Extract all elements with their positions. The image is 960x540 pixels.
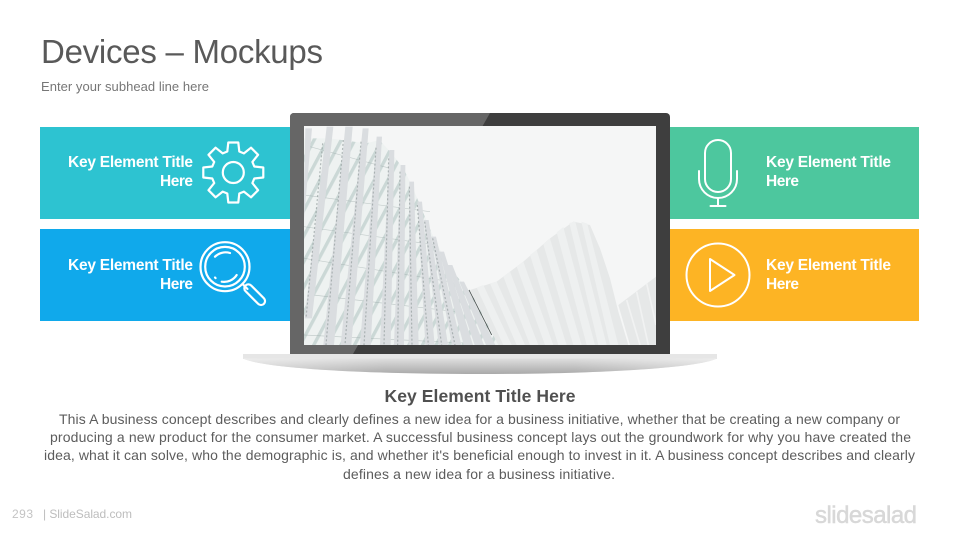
panel: search card bbox=[40, 229, 290, 321]
search card title bbox=[68, 257, 193, 293]
laptop bezel bbox=[290, 113, 670, 354]
bezel gloss bbox=[290, 113, 490, 354]
microphone card title: Here bbox=[766, 173, 799, 190]
laptop mockup bbox=[243, 113, 717, 374]
gear card title: Key Element Title bbox=[68, 154, 193, 171]
play card title: Key Element Title bbox=[766, 257, 891, 274]
logo wordmark: slidesalad bbox=[815, 502, 917, 529]
body paragraph: producing a new product for the consumer market. A successful business concept lays out the groundwork for why you have created the bbox=[50, 429, 911, 445]
footer page number: 293 bbox=[12, 507, 33, 521]
title: Devices – Mockups bbox=[41, 33, 323, 70]
panel: play card bbox=[670, 229, 919, 321]
body paragraph: idea, what it can solve, who the demographic is, and whether it's beneficial enough to invest in it. A business concept describes and clearly bbox=[44, 447, 915, 463]
icon: gear bbox=[203, 142, 263, 202]
microphone card title bbox=[766, 154, 891, 190]
gear card title bbox=[68, 154, 193, 190]
screen photo: white ribbed building bbox=[304, 126, 656, 345]
search card title: Here bbox=[160, 276, 193, 293]
panel: gear card bbox=[40, 127, 290, 219]
play card title: Here bbox=[766, 276, 799, 293]
gear card title: Here bbox=[160, 173, 193, 190]
play card title bbox=[766, 257, 891, 293]
panel: microphone card bbox=[670, 127, 919, 219]
laptop base shadow bbox=[243, 358, 717, 374]
body paragraph: This A business concept describes and clearly defines a new idea for a business initiative, whether that be creating a new company or bbox=[59, 411, 900, 427]
footer source: | SlideSalad.com bbox=[43, 507, 132, 521]
search card title: Key Element Title bbox=[68, 257, 193, 274]
microphone card title: Key Element Title bbox=[766, 154, 891, 171]
icon: magnifying glass bbox=[200, 242, 267, 307]
icon: play button bbox=[686, 244, 750, 306]
body paragraph: defines a new idea for a business initiative. bbox=[343, 466, 615, 482]
body paragraph bbox=[44, 411, 915, 482]
subhead: Enter your subhead line here bbox=[41, 79, 209, 94]
icon: microphone bbox=[699, 140, 737, 206]
main heading: Key Element Title Here bbox=[384, 386, 576, 406]
laptop base lip bbox=[243, 354, 717, 359]
